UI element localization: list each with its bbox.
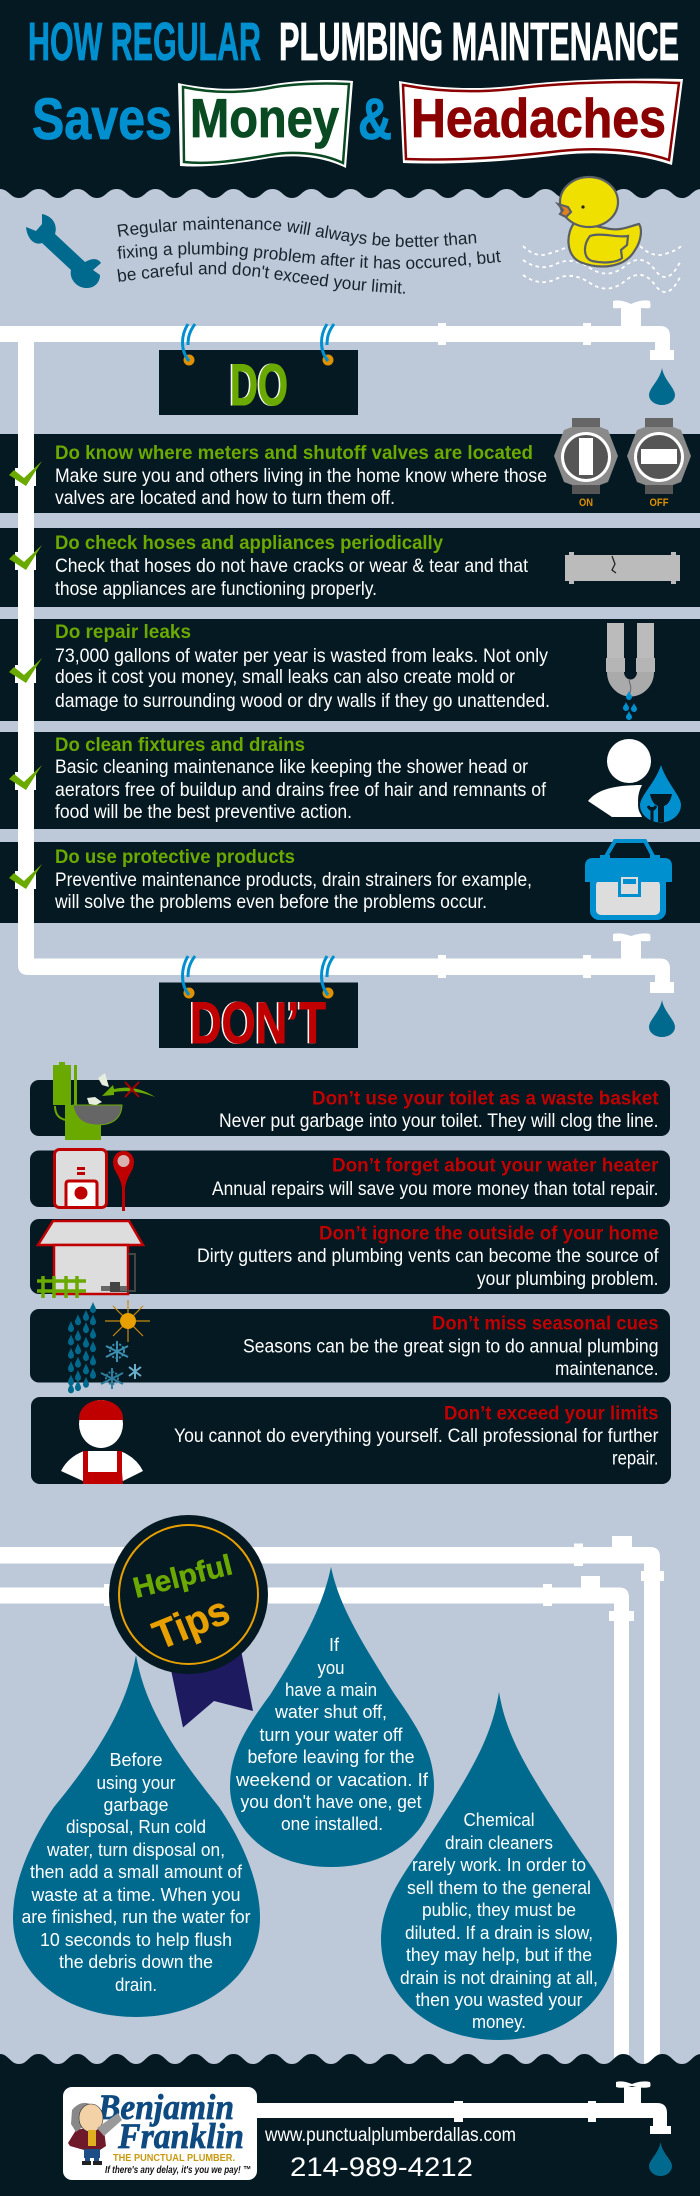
logo: benjamin franklin: If there's any delay, it's you we pay! ™ [105,2165,251,2176]
panel: don't 4: Seasons can be the great sign to do annual plumbing [243,1336,658,1358]
icon: franklin figure [68,2103,122,2165]
icon: valves on and off [554,418,691,509]
do item 2 text: those appliances are functioning properly. [55,578,377,600]
icon: seasons [68,1300,150,1393]
sign: don't: DON’T [188,991,324,1056]
panel: don't 5: You cannot do everything yourself. Call professional for further [174,1425,659,1447]
tip drop 3: drain is not draining at all, [400,1968,598,1988]
panel: don't 1: Never put garbage into your toilet. They will clog the line. [219,1110,658,1132]
do item 1 text: Do know where meters and shutoff valves are located [55,442,533,464]
icon: house [37,1221,143,1298]
icon: toilet [53,1062,155,1140]
badge: helpful tips: Tips [147,1588,236,1658]
do item 4 text: Basic cleaning maintenance like keeping the shower head or [55,756,528,778]
website: www.punctualplumberdallas.com [264,2125,516,2146]
do item 3 text: does it cost you money, small leaks can also create mold or [55,666,515,688]
icon: valves on and off: ON [579,497,593,509]
tip drop 1 [13,1655,260,2017]
sign: don't [159,956,358,1056]
sign: do [159,324,358,418]
tip drop 1: Before [110,1750,162,1770]
phone: 214-989-4212 [290,2152,473,2182]
do item 3 text: Do repair leaks [55,621,191,643]
title: Saves [32,87,172,152]
badge: helpful tips [109,1515,268,1674]
tip drop 1: the debris down the [59,1952,213,1972]
footer band [0,2054,700,2196]
tip drop 1: disposal, Run cold [66,1817,206,1837]
do item 4 text: Do clean fixtures and drains [55,734,305,756]
drop: don't faucet [649,1000,675,1037]
do item 1 text [55,442,547,509]
panel: don't 1: Don’t use your toilet as a waste basket [312,1088,659,1110]
header band [0,0,700,198]
do item 2 text: Do check hoses and appliances periodically [55,532,443,554]
tip drop 1: drain. [115,1975,157,1995]
panel: don't 1 [30,1080,670,1136]
ribbon [170,1650,253,1728]
icon: water heater [54,1150,134,1211]
icon: wrench [26,214,101,288]
intro text: be careful and don't exceed your limit. [117,262,405,294]
logo: benjamin franklin: THE PUNCTUAL PLUMBER. [113,2153,235,2164]
do item 4 text: aerators free of buildup and drains free of hair and remnants of [55,779,547,801]
panel: don't 3: your plumbing problem. [477,1268,658,1290]
title [28,12,679,152]
pipes: helpful tips [0,1536,664,2064]
do item 1 text: valves are located and how to turn them off. [55,487,395,509]
pipe: footer faucet [250,2081,671,2134]
tip drop 3: then you wasted your [416,1990,583,2010]
panel: don't 3: Don’t ignore the outside of your home [319,1222,659,1244]
tip drop 1: then add a small amount of [30,1862,243,1882]
tip drop 1: garbage [104,1795,168,1815]
tip drop 2 [230,1567,434,1867]
panel: don't 4: maintenance. [555,1358,658,1380]
panel: don't 5: repair. [612,1448,658,1470]
tip drop 1: are finished, run the water for [22,1907,251,1927]
sign: don't: DON’T [190,991,326,1056]
tip drop 2: before leaving for the [248,1747,414,1767]
intro text: fixing a plumbing problem after it has occured, but [117,242,501,270]
badge: helpful tips: Helpful [130,1549,236,1605]
do item 4 text: food will be the best preventive action. [55,801,352,823]
do panels backgrounds [0,434,700,923]
title: & [358,87,392,152]
panel: don't 2: Don’t forget about your water heater [332,1154,659,1176]
icon: plumber [61,1400,143,1484]
tip drop 3: Chemical [464,1810,534,1830]
tip drop 2: you don't have one, get [240,1792,422,1812]
panel: don't 2 [30,1150,670,1207]
icon: leaking u-trap [606,623,655,720]
do item 2 text: Check that hoses do not have cracks or wear & tear and that [55,555,529,577]
panel: don't 2: Annual repairs will save you more money than total repair. [212,1178,658,1200]
intro text: Regular maintenance will always be better than [118,216,476,248]
tip drop 2: you [318,1658,344,1678]
panel: don't 5 [31,1397,671,1484]
panel: don't 4 [30,1309,670,1382]
icon: plumber with drop [588,739,682,823]
tip drop 3: public, they must be [422,1900,576,1920]
do item 3 text: 73,000 gallons of water per year is wasted from leaks. Not only [55,645,548,667]
check marks [9,461,42,889]
tip drop 3: money. [472,2012,526,2032]
tip drop 3: sell them to the general [407,1878,591,1898]
tip drop 1: waste at a time. When you [31,1885,240,1905]
icon: valves on and off: OFF [650,497,669,509]
tip drop 1: using your [96,1773,176,1793]
do item 5 text: will solve the problems even before the problems occur. [54,891,487,913]
drop: do faucet [649,368,675,405]
logo: benjamin franklin: Benjamin [97,2087,234,2127]
do item 3 text [55,621,550,712]
icon: cracked hose [565,552,680,584]
banner: headaches: Headaches [411,87,666,149]
icon: toolbox [585,841,672,920]
title: HOW REGULAR [28,12,261,72]
panel: don't 5: Don’t exceed your limits [444,1402,659,1424]
do item 5 text: Preventive maintenance products, drain strainers for example, [55,869,532,891]
tip drop 2: turn your water off [260,1725,403,1745]
panel: don't 3 [30,1219,670,1294]
tip drop 3: diluted. If a drain is slow, [405,1923,593,1943]
tip drop 3: they may help, but if the [406,1945,592,1965]
tip drop 2: have a main [285,1680,377,1700]
panel: don't 4: Don’t miss seasonal cues [432,1312,659,1334]
tip drop 2: one installed. [281,1814,383,1834]
pipe: do section [0,300,674,993]
tip drop 1: water, turn disposal on, [46,1840,225,1860]
do item 1 text: Make sure you and others living in the home know where those [55,465,547,487]
banner: headaches [399,79,683,165]
banner: money: Money [190,87,339,149]
logo: benjamin franklin [63,2087,257,2180]
do item 3 text: damage to surrounding wood or dry walls if they go unattended. [55,690,550,712]
tip drop 2: weekend or vacation. If [235,1770,429,1790]
drop: footer faucet [649,2142,672,2176]
do item 5 text: Do use protective products [55,846,295,868]
tip drop 3: rarely work. In order to [412,1855,586,1875]
do item 4 text [55,734,547,823]
banner: money [178,80,353,168]
icon: rubber duck [558,177,641,266]
do item 5 text [54,846,532,913]
tip drop 3 [381,1692,617,2040]
panel: don't 3: Dirty gutters and plumbing vents can become the source of [197,1245,659,1267]
icon: ripples [523,246,681,292]
intro text [117,216,501,294]
logo: benjamin franklin: Franklin [117,2116,244,2156]
tip drop 2: If [329,1635,340,1655]
sign: do: DO [230,353,288,418]
tip drop 2: water shut off, [274,1702,387,1722]
do item 2 text [55,532,529,600]
tip drop 1: 10 seconds to help flush [40,1930,232,1950]
sign: do: DO [228,353,286,418]
tip drop 3: drain cleaners [445,1833,553,1853]
